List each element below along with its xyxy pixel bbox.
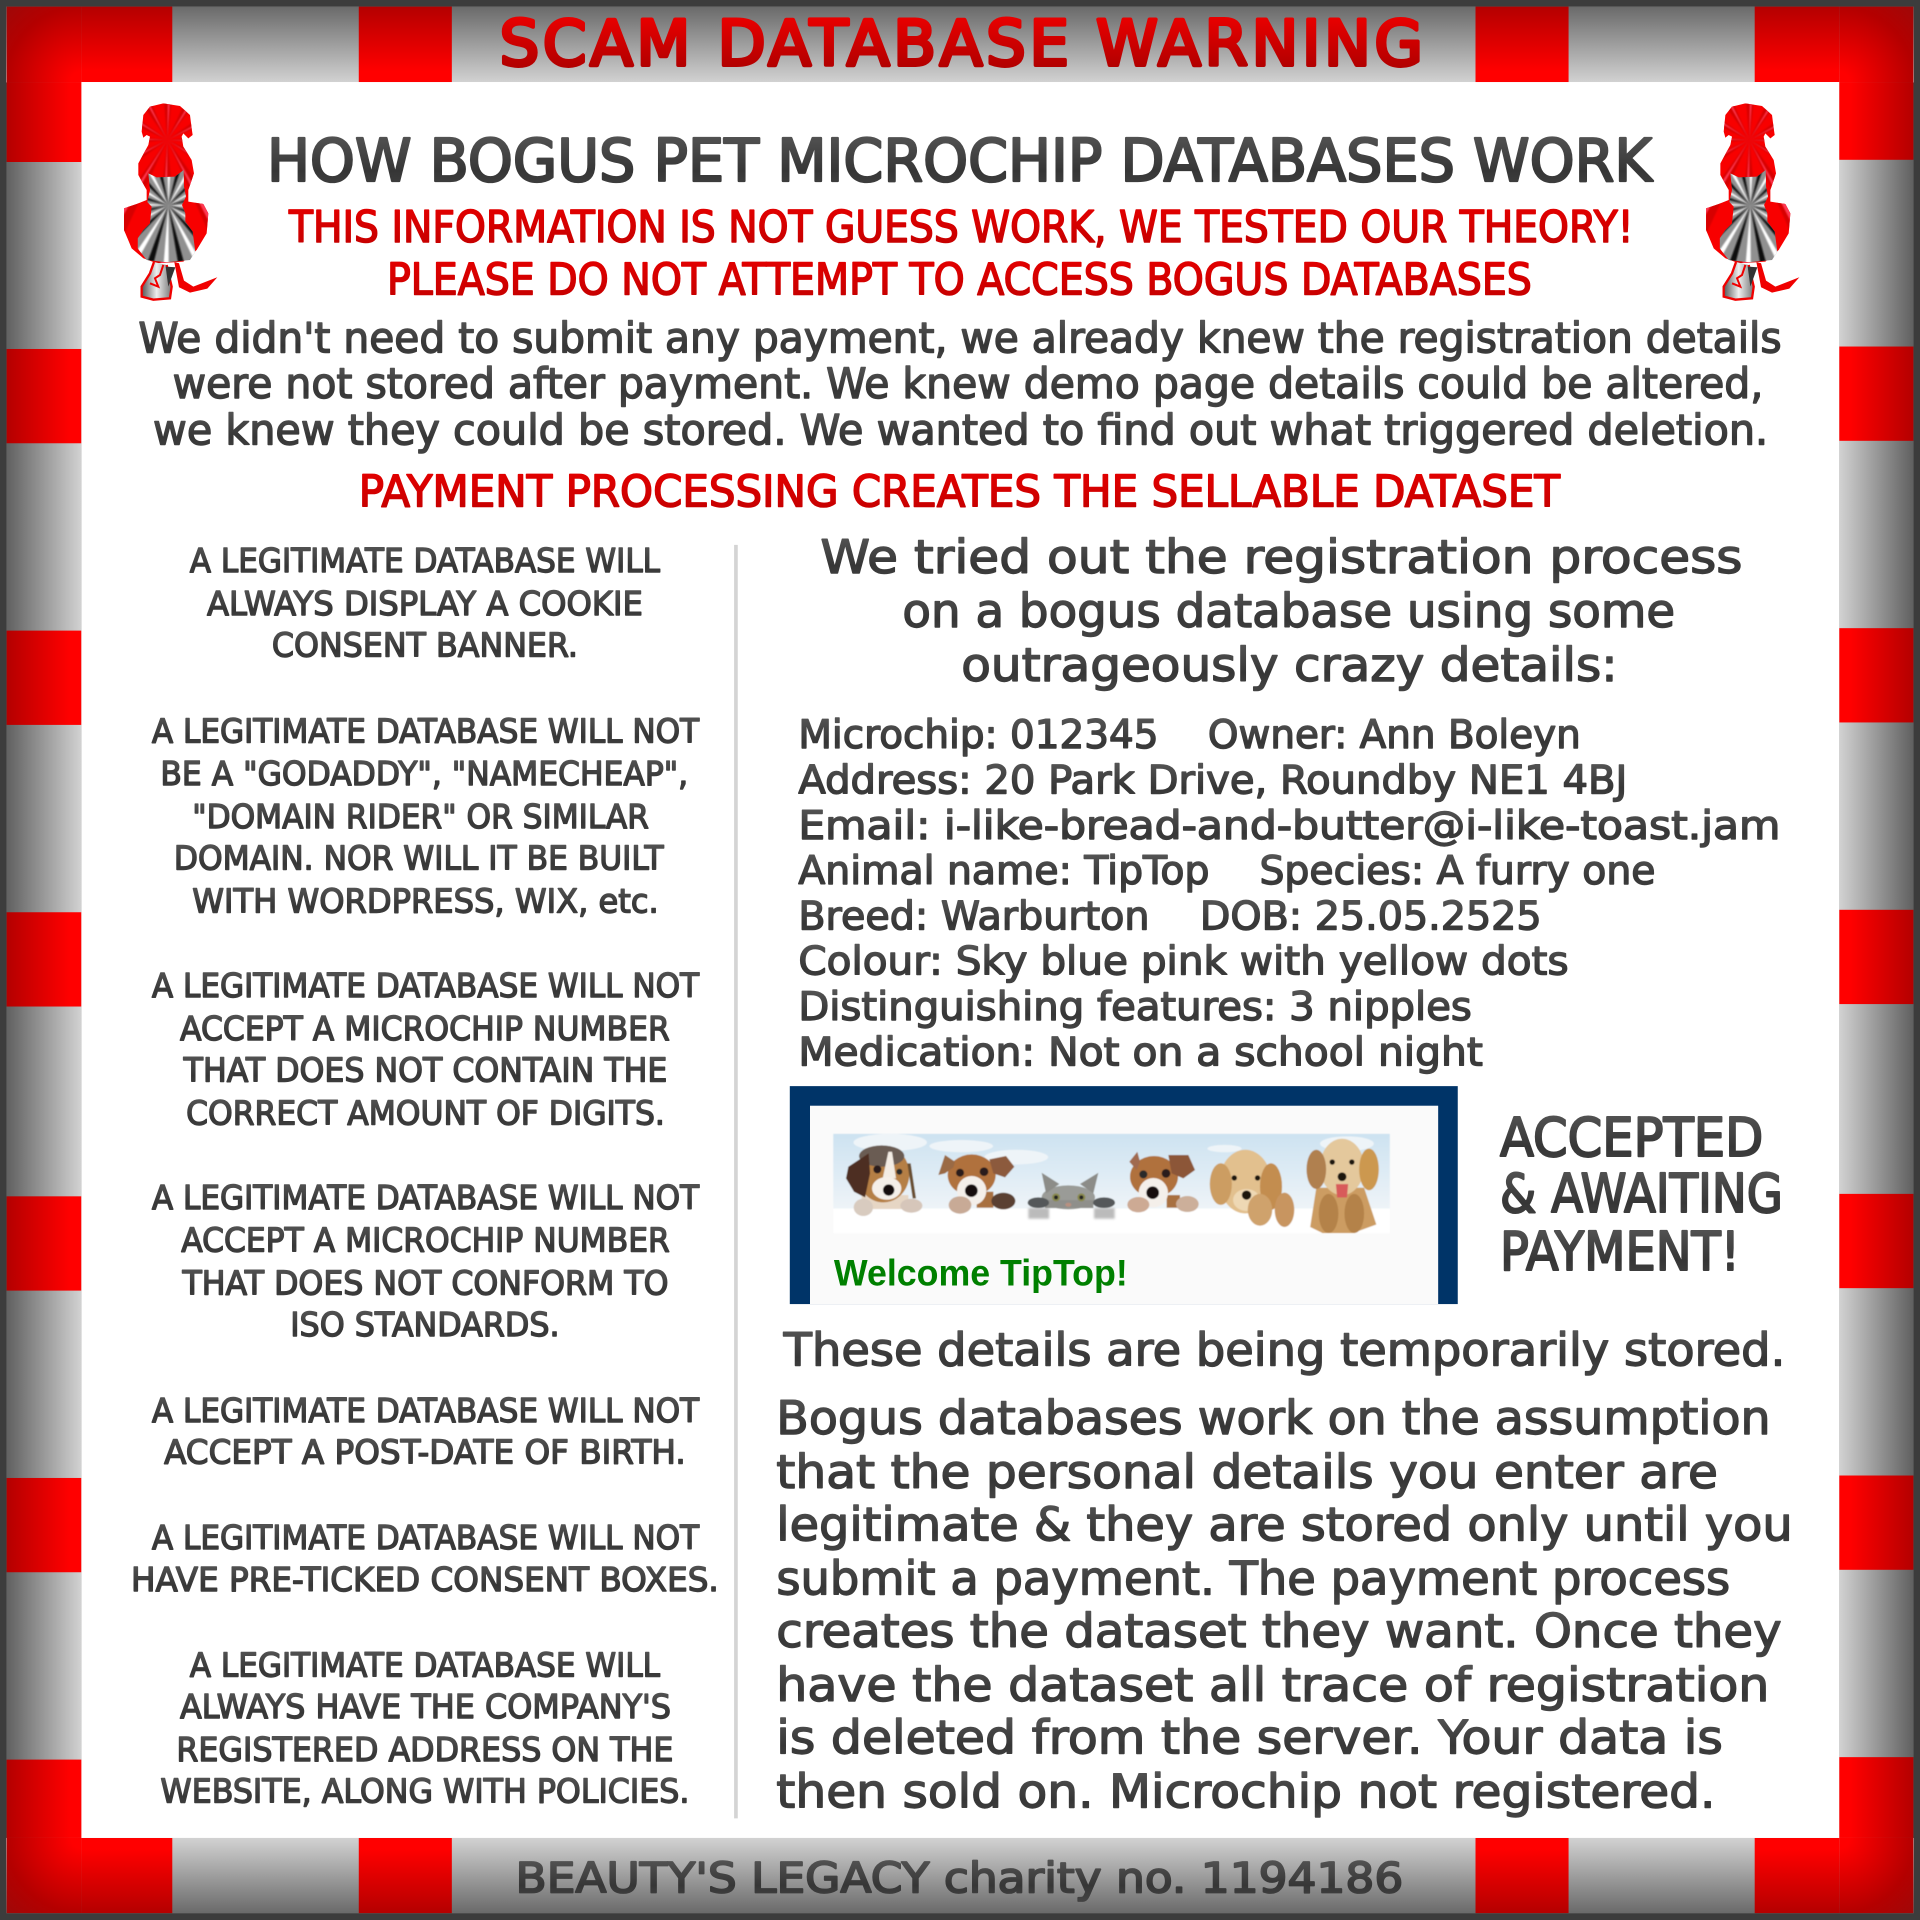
accepted label xyxy=(1500,1106,1783,1283)
right column intro: outrageously crazy details: xyxy=(961,638,1618,692)
item: domain: BE A "GODADDY", "NAMECHEAP", xyxy=(160,754,688,793)
pet: beagle puppy xyxy=(846,1145,922,1216)
red subheading block: THIS INFORMATION IS NOT GUESS WORK, WE TESTED OUR THEORY! xyxy=(288,203,1633,253)
left red blocks xyxy=(7,349,81,1572)
accepted label: ACCEPTED xyxy=(1500,1106,1763,1169)
item: consent boxes: HAVE PRE-TICKED CONSENT BOXES. xyxy=(131,1560,719,1599)
pet: brown puppy xyxy=(938,1154,1015,1214)
explanation paragraph: Bogus databases work on the assumption xyxy=(776,1391,1771,1445)
test registration details: Breed: Warburton DOB: 25.05.2525 xyxy=(798,894,1542,939)
item: registered address: ALWAYS HAVE THE COMPANY'S xyxy=(180,1687,671,1726)
explanation paragraph: that the personal details you enter are xyxy=(776,1445,1718,1499)
stored note: These details are being temporarily stored. xyxy=(783,1323,1785,1376)
item: date of birth: A LEGITIMATE DATABASE WILL NOT xyxy=(152,1391,700,1430)
item: digits: A LEGITIMATE DATABASE WILL NOT xyxy=(152,966,700,1005)
item: registered address: WEBSITE, ALONG WITH POLICIES. xyxy=(160,1772,689,1811)
intro paragraph: We didn't need to submit any payment, we already knew the registration details xyxy=(138,314,1782,363)
icon: dog and cat logo right xyxy=(1683,73,1816,300)
explanation paragraph xyxy=(776,1391,1793,1818)
left band gray xyxy=(7,82,81,1838)
item: cookie banner: A LEGITIMATE DATABASE WILL xyxy=(190,541,661,580)
intro paragraph xyxy=(138,314,1782,454)
bottom band gray xyxy=(6,1838,1914,1913)
explanation paragraph: then sold on. Microchip not registered. xyxy=(776,1764,1716,1818)
item: ISO: ISO STANDARDS. xyxy=(290,1305,560,1344)
item: digits: THAT DOES NOT CONTAIN THE xyxy=(183,1050,667,1089)
item: date of birth xyxy=(152,1391,700,1472)
welcome text: Welcome TipTop! xyxy=(834,1253,1128,1294)
icon: dog and cat logo left xyxy=(101,73,234,300)
item: registered address xyxy=(160,1646,689,1811)
test registration details: Microchip: 012345 Owner: Ann Boleyn xyxy=(798,713,1581,758)
right column intro: We tried out the registration process xyxy=(820,530,1742,584)
top red blocks xyxy=(359,7,1569,83)
pet: golden retriever xyxy=(1210,1150,1294,1227)
explanation paragraph: have the dataset all trace of registration xyxy=(776,1658,1769,1712)
item: digits: CORRECT AMOUNT OF DIGITS. xyxy=(186,1093,665,1132)
test registration details xyxy=(798,713,1780,1075)
intro paragraph: we knew they could be stored. We wanted to find out what triggered deletion. xyxy=(153,405,1768,454)
heading: HOW BOGUS PET MICROCHIP DATABASES WORK xyxy=(267,126,1653,195)
item: domain: A LEGITIMATE DATABASE WILL NOT xyxy=(152,711,700,750)
explanation paragraph: legitimate & they are stored only until you xyxy=(776,1497,1793,1551)
item: cookie banner xyxy=(190,541,661,665)
corner: top right xyxy=(1755,7,1913,160)
test registration details: Address: 20 Park Drive, Roundby NE1 4BJ xyxy=(798,758,1627,803)
red statement: PAYMENT PROCESSING CREATES THE SELLABLE DATASET xyxy=(359,467,1560,517)
item: ISO: A LEGITIMATE DATABASE WILL NOT xyxy=(152,1178,700,1217)
item: cookie banner: CONSENT BANNER. xyxy=(272,626,578,665)
test registration details: Animal name: TipTop Species: A furry one xyxy=(798,849,1656,894)
pet: jack russell puppy xyxy=(1127,1152,1199,1212)
item: domain: "DOMAIN RIDER" OR SIMILAR xyxy=(192,797,649,836)
top band gray xyxy=(6,7,1914,83)
explanation paragraph: submit a payment. The payment process xyxy=(776,1551,1730,1605)
pet: tabby cat xyxy=(1028,1173,1115,1219)
red subheading block xyxy=(288,203,1633,305)
item: registered address: A LEGITIMATE DATABASE WILL xyxy=(190,1646,661,1685)
title: SCAM DATABASE WARNING xyxy=(500,7,1427,80)
right red blocks xyxy=(1839,347,1913,1570)
test registration details: Email: i-like-bread-and-butter@i-like-toast.jam xyxy=(798,804,1780,849)
corner: bottom left xyxy=(7,1760,172,1913)
right band gray xyxy=(1839,82,1913,1838)
test registration details: Colour: Sky blue pink with yellow dots xyxy=(798,940,1569,985)
right column intro: on a bogus database using some xyxy=(902,584,1675,638)
item: ISO: ACCEPT A MICROCHIP NUMBER xyxy=(181,1221,670,1260)
item: domain: WITH WORDPRESS, WIX, etc. xyxy=(192,881,659,920)
corner: bottom right xyxy=(1755,1757,1913,1913)
item: ISO: THAT DOES NOT CONFORM TO xyxy=(181,1264,669,1303)
right column intro xyxy=(820,530,1742,692)
corner: top left xyxy=(7,7,172,162)
test registration details: Distinguishing features: 3 nipples xyxy=(798,985,1472,1030)
item: domain xyxy=(152,711,700,920)
explanation paragraph: creates the dataset they want. Once they xyxy=(776,1604,1782,1658)
photo strip: pets peeking over a ledge xyxy=(833,1134,1390,1233)
item: ISO xyxy=(152,1178,700,1344)
item: domain: DOMAIN. NOR WILL IT BE BUILT xyxy=(174,839,664,878)
footer: BEAUTY'S LEGACY charity no. 1194186 xyxy=(516,1853,1403,1902)
red subheading block: PLEASE DO NOT ATTEMPT TO ACCESS BOGUS DATABASES xyxy=(387,255,1532,305)
item: digits xyxy=(152,966,700,1132)
intro paragraph: were not stored after payment. We knew demo page details could be altered, xyxy=(173,359,1763,408)
item: cookie banner: ALWAYS DISPLAY A COOKIE xyxy=(207,584,643,623)
item: digits: ACCEPT A MICROCHIP NUMBER xyxy=(180,1009,670,1048)
screenshot: welcome page xyxy=(790,1086,1458,1304)
pets drawn in zoom coordinates xyxy=(846,1145,1199,1219)
accepted label: & AWAITING xyxy=(1500,1162,1783,1225)
left column: legitimate database checklist xyxy=(131,541,719,1811)
item: date of birth: ACCEPT A POST-DATE OF BIRTH. xyxy=(164,1433,686,1472)
item: consent boxes xyxy=(131,1518,719,1599)
item: registered address: REGISTERED ADDRESS ON THE xyxy=(176,1730,673,1769)
pet: golden puppy with tongue xyxy=(1307,1139,1379,1233)
item: consent boxes: A LEGITIMATE DATABASE WILL NOT xyxy=(152,1518,700,1557)
bottom red blocks xyxy=(359,1838,1569,1913)
accepted label: PAYMENT! xyxy=(1500,1220,1740,1283)
test registration details: Medication: Not on a school night xyxy=(798,1030,1483,1075)
explanation paragraph: is deleted from the server. Your data is xyxy=(776,1710,1723,1764)
